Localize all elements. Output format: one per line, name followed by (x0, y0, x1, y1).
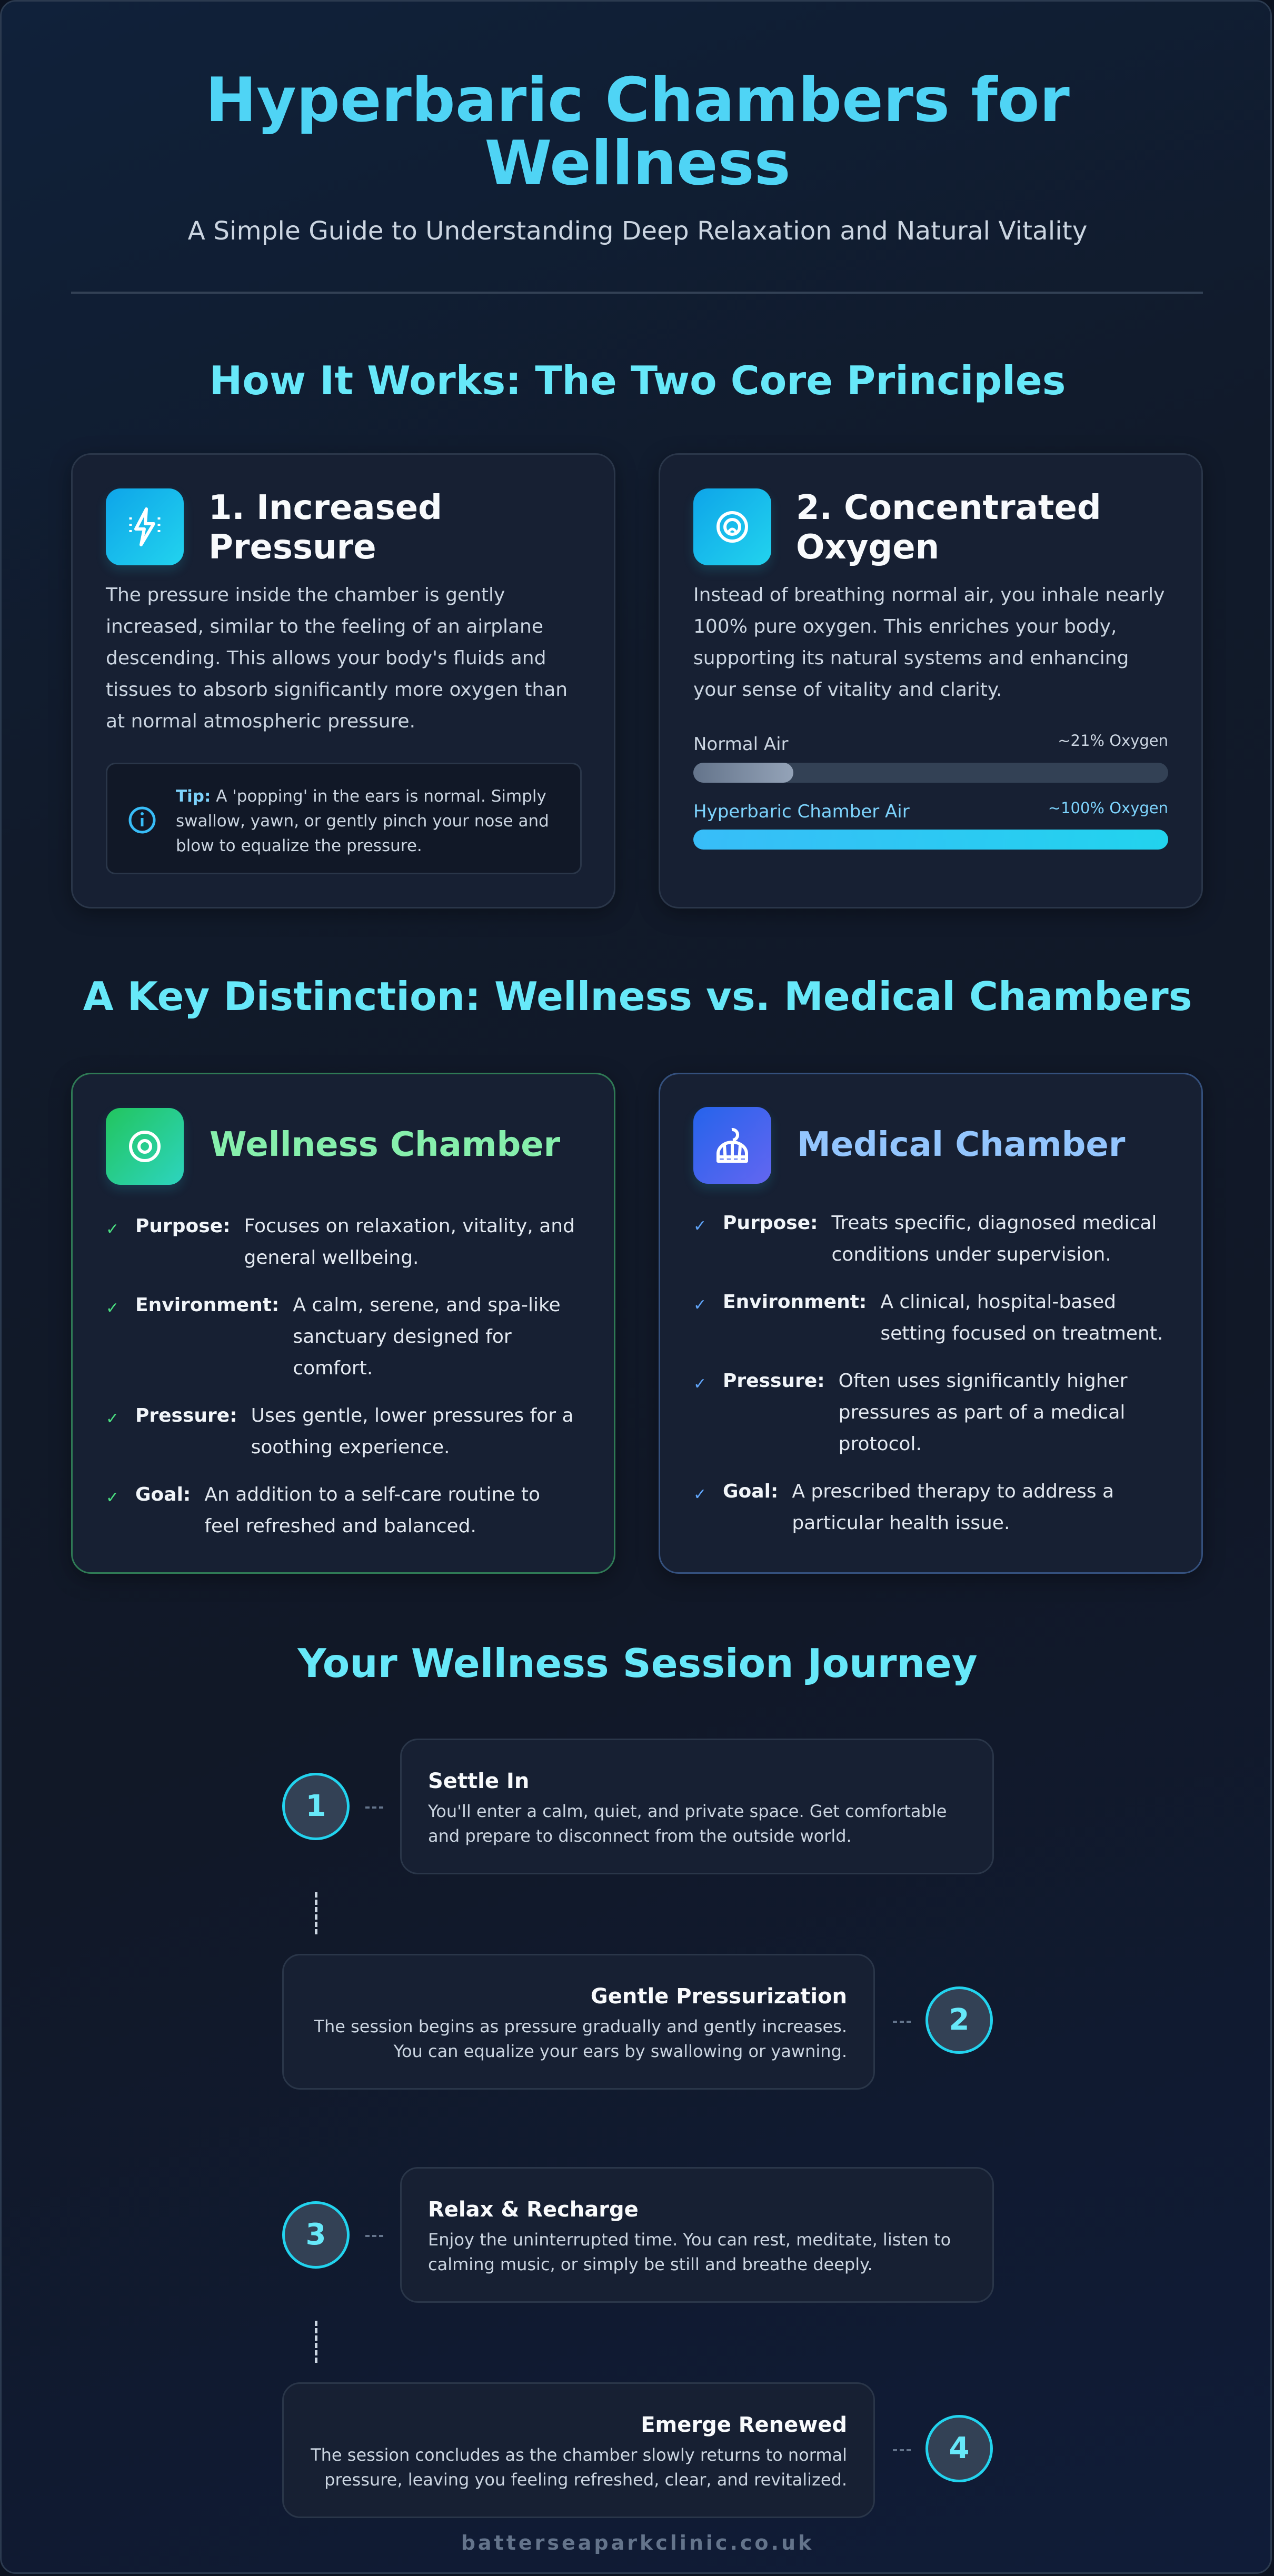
list: wellness: Purpose: (135, 1215, 231, 1237)
list: wellness: Goal: (135, 1484, 191, 1505)
timeline step 2 (282, 1954, 993, 2090)
icon: info (128, 806, 156, 834)
icon: medical person (693, 1107, 771, 1184)
body text: The pressure inside the chamber is gently increased, similar to the feeling of an airplane descending. This allows your body's fluids and tissues to absorb significantly more oxygen than at normal atmospheric pressure. (106, 584, 568, 732)
footer: batterseaparkclinic.co.uk (461, 2531, 814, 2554)
card title: Wellness Chamber (210, 1125, 560, 1164)
list: wellness (106, 1215, 575, 1537)
timeline step 2: You can equalize your ears by swallowing or yawning. (394, 2041, 847, 2061)
body text: Instead of breathing normal air, you inhale nearly 100% pure oxygen. This enriches your body, supporting its natural systems and enhancing your sense of vitality and clarity. (693, 584, 1164, 701)
icon: oxygen (693, 488, 771, 565)
list: wellness: Uses gentle, lower pressures for a soothing experience. (251, 1405, 574, 1458)
list: wellness: A calm, serene, and spa-like sanctuary designed for comfort. (293, 1294, 561, 1379)
card title: Pressure (208, 528, 376, 567)
timeline step 3 (282, 2167, 994, 2303)
timeline step 1: You'll enter a calm, quiet, and private space. Get comfortable (428, 1801, 947, 1821)
timeline step 4: The session concludes as the chamber slowly returns to normal (311, 2445, 847, 2465)
number badge 2 (925, 1986, 993, 2054)
list: medical: Goal: (723, 1481, 778, 1502)
list: wellness: An addition to a self-care routine to (204, 1484, 540, 1505)
timeline step 2: The session begins as pressure gradually and gently increases. (314, 2016, 847, 2036)
icon: target (106, 1108, 184, 1185)
card title: 1. Increased (208, 488, 442, 527)
list: medical: ✓ (693, 1375, 706, 1393)
list: medical: A clinical, hospital-based setting focused on treatment. (880, 1291, 1163, 1344)
bar chart: oxygen comparison: ~100% Oxygen (1048, 799, 1168, 817)
bar chart: oxygen comparison: Hyperbaric Chamber Air (693, 801, 910, 822)
title: Hyperbaric Chambers for (205, 65, 1070, 136)
list: wellness: Environment: (135, 1294, 279, 1316)
list: medical: ✓ (693, 1485, 706, 1504)
number badge 4 (925, 2415, 993, 2482)
list: wellness: Focuses on relaxation, vitality, and general wellbeing. (244, 1215, 575, 1269)
title: Wellness (484, 128, 791, 199)
timeline step 4: pressure, leaving you feeling refreshed, clear, and revitalized. (324, 2470, 847, 2490)
bar chart: oxygen comparison: Normal Air (693, 734, 789, 755)
timeline step 4: Emerge Renewed (641, 2413, 847, 2437)
list: medical: A prescribed therapy to address a particular health issue. (792, 1481, 1114, 1534)
list: medical: Pressure: (723, 1370, 825, 1392)
timeline step 1: and prepare to disconnect from the outside world. (428, 1826, 852, 1846)
number badge 3: 3 (306, 2218, 326, 2252)
callout: tip (106, 763, 582, 874)
timeline step 1 (282, 1739, 994, 1874)
subtitle: A Simple Guide to Understanding Deep Relaxation and Natural Vitality (188, 216, 1087, 246)
card title (208, 488, 442, 567)
number badge 4: 4 (949, 2431, 969, 2465)
card title: 2. Concentrated (796, 488, 1101, 527)
panel: wellness chamber (71, 1073, 615, 1574)
number badge 2: 2 (949, 2003, 969, 2037)
list: medical: ✓ (693, 1296, 706, 1314)
list: medical: Purpose: (723, 1212, 818, 1234)
panel: increased pressure (71, 453, 615, 908)
list: medical: Treats specific, diagnosed medical conditions under supervision. (832, 1212, 1157, 1265)
title (205, 65, 1070, 199)
card title: Oxygen (796, 528, 939, 567)
heading: how it works: How It Works: The Two Core Principles (210, 357, 1066, 404)
list: wellness: ✓ (106, 1299, 119, 1317)
list: wellness: ✓ (106, 1410, 119, 1428)
timeline step 4 (282, 2382, 993, 2518)
list: medical: ✓ (693, 1217, 706, 1235)
number badge 1: 1 (306, 1789, 326, 1823)
bar chart: oxygen comparison (693, 732, 1168, 850)
heading: key distinction: A Key Distinction: Wellness vs. Medical Chambers (83, 973, 1192, 1020)
number badge 1 (282, 1773, 350, 1840)
list: medical (693, 1212, 1163, 1534)
timeline step 3: calming music, or simply be still and breathe deeply. (428, 2254, 873, 2274)
bar chart: oxygen comparison: ~21% Oxygen (1058, 732, 1168, 750)
list: wellness: ✓ (106, 1489, 119, 1507)
list: wellness: ✓ (106, 1220, 119, 1239)
card title (796, 488, 1101, 567)
list: wellness: Pressure: (135, 1405, 237, 1426)
list: wellness: feel refreshed and balanced. (204, 1515, 476, 1537)
icon: lightning (106, 488, 184, 565)
list: medical: Environment: (723, 1291, 867, 1313)
callout: tip: Tip: A 'popping' in the ears is normal. Simply swallow, yawn, or gently pinch your nose and blow to equalize the pressure. (176, 787, 549, 855)
number badge 3 (282, 2201, 350, 2269)
card title: Medical Chamber (797, 1125, 1125, 1164)
timeline step 3: Enjoy the uninterrupted time. You can rest, meditate, listen to (428, 2230, 951, 2250)
timeline step 3: Relax & Recharge (428, 2198, 639, 2222)
panel: medical chamber (659, 1073, 1203, 1574)
panel: concentrated oxygen (659, 453, 1203, 908)
timeline step 1: Settle In (428, 1769, 529, 1793)
heading: journey: Your Wellness Session Journey (297, 1640, 978, 1686)
timeline step 2: Gentle Pressurization (591, 1984, 847, 2009)
list: medical: Often uses significantly higher pressures as part of a medical protocol. (839, 1370, 1128, 1455)
